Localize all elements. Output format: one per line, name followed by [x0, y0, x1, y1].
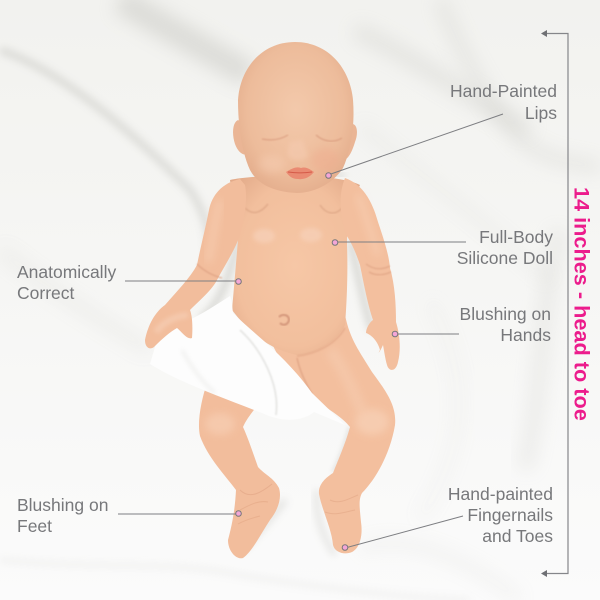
label: blushing on hands: Hands: [500, 325, 551, 345]
doll: left arm and hand: [145, 179, 246, 348]
doll: head and face: [238, 42, 354, 193]
callout lines: [118, 114, 503, 548]
label: full-body silicone doll: Silicone Doll: [457, 248, 553, 268]
label: hand-painted lips: Lips: [525, 103, 557, 123]
doll: right leg: [270, 315, 395, 553]
label: hand-painted lips: Hand-Painted: [450, 81, 557, 101]
label: full-body silicone doll: Full-Body: [479, 227, 553, 247]
label: blushing on feet: Blushing on: [17, 495, 108, 515]
lips: [286, 167, 314, 179]
label: blushing on feet: Feet: [17, 516, 52, 536]
label: anatomically correct: Anatomically: [17, 262, 116, 282]
label: blushing on hands: Blushing on: [460, 304, 551, 324]
height bracket arrow: [541, 30, 568, 577]
label: fingernails and toes: and Toes: [482, 526, 553, 546]
doll: right arm and hand: [341, 178, 400, 370]
doll: ears: [233, 120, 357, 160]
doll figure: [145, 42, 400, 558]
label: fingernails and toes: Hand-painted: [448, 484, 553, 504]
doll: left leg: [199, 380, 280, 558]
label: anatomically correct: Correct: [17, 283, 75, 303]
doll: torso: [230, 176, 360, 394]
marker dots: [236, 173, 398, 550]
label: fingernails and toes: Fingernails: [467, 505, 553, 525]
height label: 14 inches - head to toe: [570, 187, 594, 421]
blanket flap over hip: [150, 296, 345, 425]
